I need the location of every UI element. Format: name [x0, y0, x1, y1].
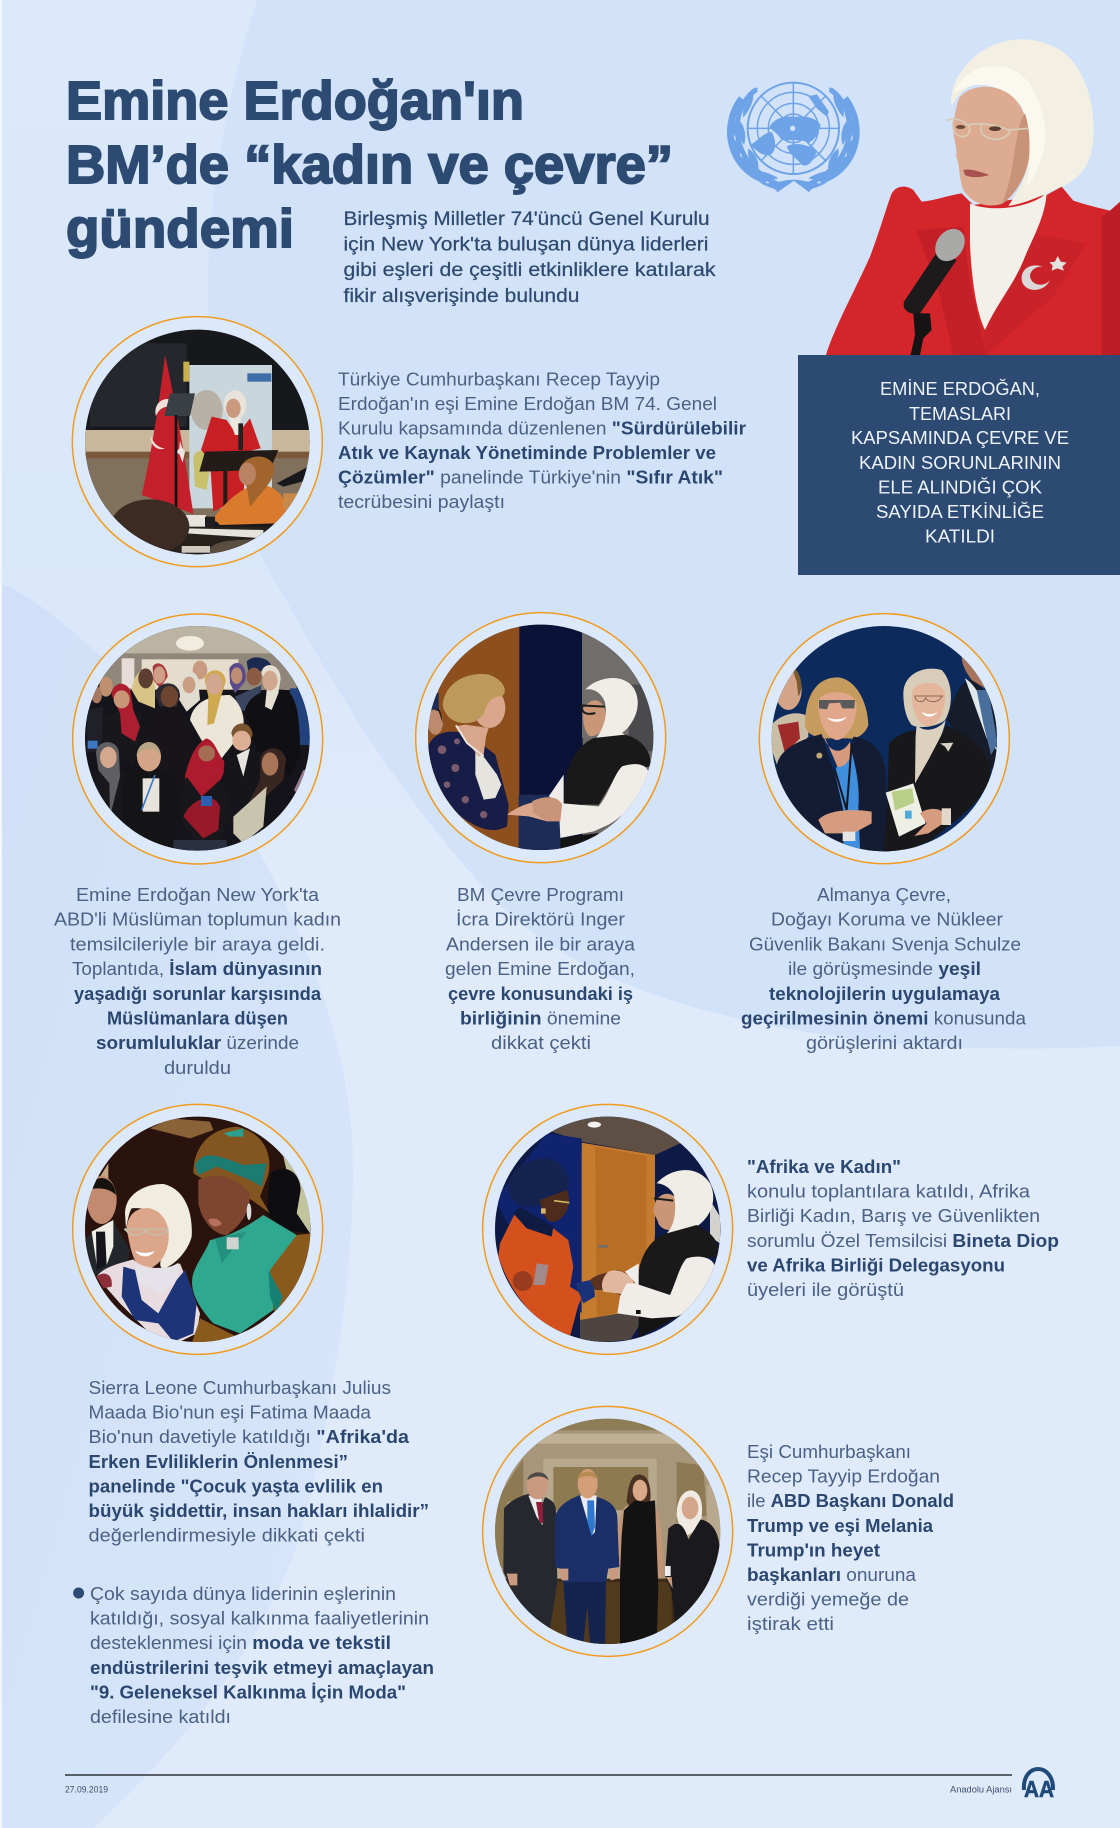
text: Svenja Schulze meeting: ile görüşmesinde yeşil [788, 958, 981, 979]
mouth [963, 170, 989, 177]
text: dinner with Trump: Trump'ın heyet [747, 1539, 880, 1560]
text: Svenja Schulze meeting: Doğayı Koruma ve Nükleer [771, 909, 1003, 930]
title: Emine Erdoğan'ın [66, 71, 524, 131]
photo 5: with Fatima Maada Bio [70, 1100, 330, 1360]
microphone [904, 252, 957, 314]
photo 1: panel speech with Turkish flag [70, 310, 330, 570]
text: Sierra Leone panel: panelinde "Çocuk yaşta evlilik en [88, 1475, 383, 1496]
text: fashion show [90, 1583, 434, 1727]
text: Sıfır Atık panel: Çözümler" panelinde Türkiye'nin "Sıfır Atık" [338, 466, 723, 488]
text: Inger Andersen meeting: birliğinin önemine [460, 1008, 621, 1028]
text: Inger Andersen meeting [445, 884, 636, 1053]
text: Sierra Leone panel [88, 1377, 429, 1546]
photo 2: group of women [70, 610, 330, 870]
text: Sierra Leone panel: Sierra Leone Cumhurbaşkanı Julius [88, 1377, 391, 1398]
main portrait: Emine Erdoğan at microphone [826, 39, 1120, 355]
text: Svenja Schulze meeting: Güvenlik Bakanı Svenja Schulze [749, 933, 1021, 954]
text: Svenja Schulze meeting: teknolojilerin uygulamaya [769, 983, 1001, 1004]
panel: dark callout box [798, 355, 1120, 575]
text: Muslim community meeting: ABD'li Müslüman toplumun kadın [54, 909, 341, 930]
panel: dark callout box: EMİNE ERDOĞAN, [880, 378, 1040, 399]
text: Sıfır Atık panel [338, 368, 746, 512]
text: Muslim community meeting: sorumluluklar üzerinde [96, 1032, 299, 1053]
text: dinner with Trump: Trump ve eşi Melania [747, 1515, 934, 1536]
photo 7: with Trump delegation [480, 1402, 740, 1662]
text: Africa and women: Birliği Kadın, Barış ve Güvenlikten [747, 1205, 1040, 1226]
title: gündemi [66, 199, 294, 259]
text: Africa and women: konulu toplantılara katıldı, Afrika [747, 1181, 1031, 1202]
text: Sierra Leone panel: Bio'nun davetiyle katıldığı "Afrika'da [88, 1426, 410, 1447]
text: Muslim community meeting: duruldu [164, 1057, 231, 1078]
hijab [951, 39, 1094, 206]
text: Africa and women: ve Afrika Birliği Delegasyonu [747, 1254, 1005, 1275]
text: Inger Andersen meeting: Andersen ile bir araya [446, 933, 636, 954]
text: Sıfır Atık panel: tecrübesini paylaştı [338, 491, 505, 512]
text: Sıfır Atık panel: Kurulu kapsamında düzenlenen "Sürdürülebilir [338, 418, 746, 438]
text: dinner with Trump: Recep Tayyip Erdoğan [747, 1466, 940, 1487]
intro text [344, 208, 716, 307]
jacket shading [917, 227, 987, 355]
text: Muslim community meeting: yaşadığı sorunlar karşısında [74, 983, 322, 1004]
text: Svenja Schulze meeting: geçirilmesinin önemi konusunda [741, 1008, 1027, 1028]
text: Muslim community meeting [54, 884, 341, 1078]
text: Africa and women: sorumlu Özel Temsilcisi Bineta Diop [747, 1230, 1059, 1251]
text: Svenja Schulze meeting: görüşlerini aktardı [806, 1032, 963, 1053]
text: dinner with Trump: Eşi Cumhurbaşkanı [747, 1441, 911, 1462]
text: Muslim community meeting: Emine Erdoğan New York'ta [76, 884, 320, 905]
text: Sıfır Atık panel: Atık ve Kaynak Yönetiminde Problemler ve [338, 442, 716, 463]
text: Sierra Leone panel: büyük şiddettir, insan hakları ihlalidir” [88, 1500, 429, 1521]
text: Svenja Schulze meeting: Almanya Çevre, [817, 884, 951, 905]
text: fashion show: desteklenmesi için moda ve tekstil [90, 1632, 391, 1653]
text: Inger Andersen meeting: dikkat çekti [491, 1032, 591, 1053]
text: Muslim community meeting: Toplantıda, İslam dünyasının [72, 958, 322, 979]
brooch: crescent and star [1022, 265, 1050, 290]
text: Inger Andersen meeting: İcra Direktörü Inger [456, 909, 625, 930]
footer [65, 1769, 1054, 1802]
intro text: için New York'ta buluşan dünya liderleri [344, 234, 708, 256]
white blouse [970, 193, 1047, 330]
text: Sıfır Atık panel: Erdoğan'ın eşi Emine Erdoğan BM 74. Genel [338, 393, 717, 414]
text: Sierra Leone panel: değerlendirmesiyle dikkati çekti [88, 1525, 365, 1546]
text: fashion show: Çok sayıda dünya liderinin eşlerinin [90, 1583, 396, 1604]
intro text: gibi eşleri de çeşitli etkinliklere katılarak [344, 259, 716, 281]
icon: bullet [73, 1588, 84, 1598]
agency name: Anadolu Ajansı [950, 1784, 1012, 1794]
text: Muslim community meeting: temsilcileriyle bir araya geldi. [70, 933, 325, 954]
text: dinner with Trump: başkanları onuruna [747, 1564, 917, 1585]
text: Sıfır Atık panel: Türkiye Cumhurbaşkanı Recep Tayyip [338, 368, 660, 390]
glasses and eyes [946, 119, 1028, 139]
date: 27.09.2019 [65, 1784, 108, 1794]
intro text: Birleşmiş Milletler 74'üncü Genel Kurulu [344, 208, 710, 230]
panel: dark callout box: KAPSAMINDA ÇEVRE VE [851, 427, 1069, 448]
intro text: fikir alışverişinde bulundu [344, 285, 580, 307]
text: Inger Andersen meeting: BM Çevre Programı [457, 884, 624, 905]
text: Africa and women [747, 1156, 1059, 1300]
text: Inger Andersen meeting: gelen Emine Erdoğan, [445, 958, 635, 979]
text: Africa and women: "Afrika ve Kadın" [747, 1156, 901, 1177]
text: fashion show: "9. Geleneksel Kalkınma İçin Moda" [90, 1681, 406, 1702]
title: BM’de “kadın ve çevre” [66, 135, 673, 195]
panel: dark callout box: KATILDI [925, 526, 995, 546]
panel: dark callout box: TEMASLARI [909, 403, 1011, 424]
text: Sierra Leone panel: Erken Evliliklerin Önlenmesi” [88, 1451, 348, 1472]
text: Muslim community meeting: Müslümanlara düşen [107, 1008, 288, 1028]
text: fashion show: endüstrilerini teşvik etmeyi amaçlayan [90, 1657, 434, 1678]
icon: United Nations emblem [729, 83, 859, 192]
red jacket [826, 187, 1120, 355]
text: dinner with Trump [747, 1441, 954, 1634]
text: dinner with Trump: ile ABD Başkanı Donald [747, 1490, 954, 1511]
photo 3: handshake with Inger Andersen [412, 608, 672, 868]
text: dinner with Trump: verdiği yemeğe de [747, 1589, 909, 1610]
panel: dark callout box: KADIN SORUNLARININ [859, 452, 1061, 473]
face [953, 87, 1029, 206]
text: Svenja Schulze meeting [741, 884, 1027, 1053]
text: Inger Andersen meeting: çevre konusundaki iş [448, 983, 633, 1004]
panel: dark callout box: ELE ALINDIĞI ÇOK [878, 476, 1043, 498]
text: Africa and women: üyeleri ile görüştü [747, 1279, 904, 1300]
icon: Anadolu Agency logo: AA [1024, 1776, 1054, 1802]
text: dinner with Trump: iştirak etti [747, 1613, 834, 1634]
photo 4: with Svenja Schulze [755, 610, 1015, 870]
text: fashion show: defilesine katıldı [90, 1706, 231, 1727]
photo 6: with Bineta Diop [480, 1100, 740, 1360]
title [66, 71, 673, 259]
text: Sierra Leone panel: Maada Bio'nun eşi Fatima Maada [88, 1402, 372, 1423]
text: fashion show: katıldığı, sosyal kalkınma faaliyetlerinin [90, 1608, 429, 1629]
panel: dark callout box: SAYIDA ETKİNLİĞE [876, 501, 1044, 522]
